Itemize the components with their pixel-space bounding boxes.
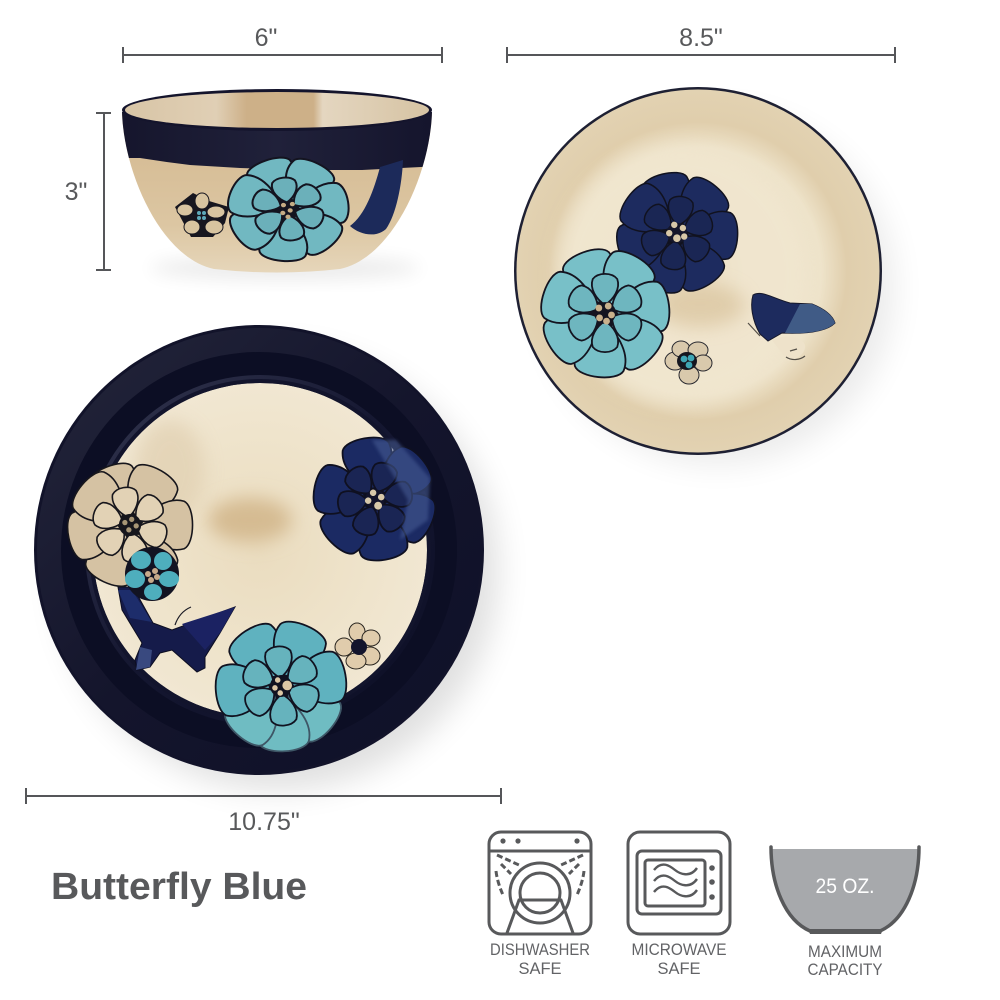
dimension: bowl width 6 inch bbox=[123, 24, 442, 63]
label: microwave safe: MICROWAVE bbox=[632, 941, 726, 959]
bowl teal flower bbox=[214, 147, 357, 272]
dinner plate small cream flower bbox=[335, 623, 380, 669]
icon: dishwasher safe bbox=[489, 832, 591, 934]
dinner plate butterfly bbox=[118, 587, 235, 672]
bowl rim and interior bbox=[122, 89, 432, 131]
icon: bowl maximum capacity 25 oz: 25 OZ. bbox=[816, 875, 874, 898]
bowl small flower bbox=[175, 193, 229, 237]
dinner plate cream well bbox=[93, 383, 427, 717]
dinner plate small teal flower bbox=[125, 547, 179, 601]
label: maximum capacity: CAPACITY bbox=[808, 961, 882, 979]
salad plate small flower bbox=[665, 341, 712, 384]
bowl bbox=[115, 89, 440, 272]
label: dishwasher safe: SAFE bbox=[518, 960, 562, 978]
dimension: bowl height 3 inch: 3" bbox=[65, 178, 87, 206]
salad plate navy flower bbox=[604, 159, 748, 305]
dimension: bowl width 6 inch: 6" bbox=[255, 24, 277, 52]
salad plate butterfly bbox=[748, 293, 835, 361]
salad plate rim and glaze bbox=[514, 87, 882, 455]
dinner plate navy flower bbox=[292, 415, 457, 583]
dinner plate large teal flower bbox=[210, 611, 354, 758]
label: dishwasher safe: DISHWASHER bbox=[490, 941, 590, 959]
dimension: salad plate width 8.5 inch bbox=[507, 24, 895, 63]
dimension: salad plate width 8.5 inch: 8.5" bbox=[679, 24, 723, 52]
label: maximum capacity: MAXIMUM bbox=[808, 943, 882, 961]
dinner plate rim rings bbox=[34, 325, 484, 775]
dinner plate bbox=[34, 325, 484, 775]
dimension: dinner plate width 10.75 inch bbox=[26, 788, 501, 836]
title: Butterfly Blue bbox=[51, 866, 307, 908]
label: microwave safe: SAFE bbox=[657, 960, 701, 978]
salad plate bbox=[514, 87, 882, 455]
dinner plate navy flower glare bbox=[372, 440, 430, 540]
dinner plate beige flower bbox=[56, 448, 207, 602]
icon: microwave safe bbox=[628, 832, 730, 934]
bowl butterfly bbox=[350, 160, 403, 234]
dimension: dinner plate width 10.75 inch: 10.75" bbox=[228, 808, 300, 836]
salad plate teal flower bbox=[519, 229, 693, 401]
bowl dark band bbox=[122, 112, 432, 170]
bowl body bbox=[122, 112, 432, 272]
dimension: bowl height 3 inch bbox=[65, 113, 111, 270]
soft shadows under the dishes bbox=[58, 112, 894, 790]
icon: bowl maximum capacity 25 oz bbox=[771, 847, 919, 934]
